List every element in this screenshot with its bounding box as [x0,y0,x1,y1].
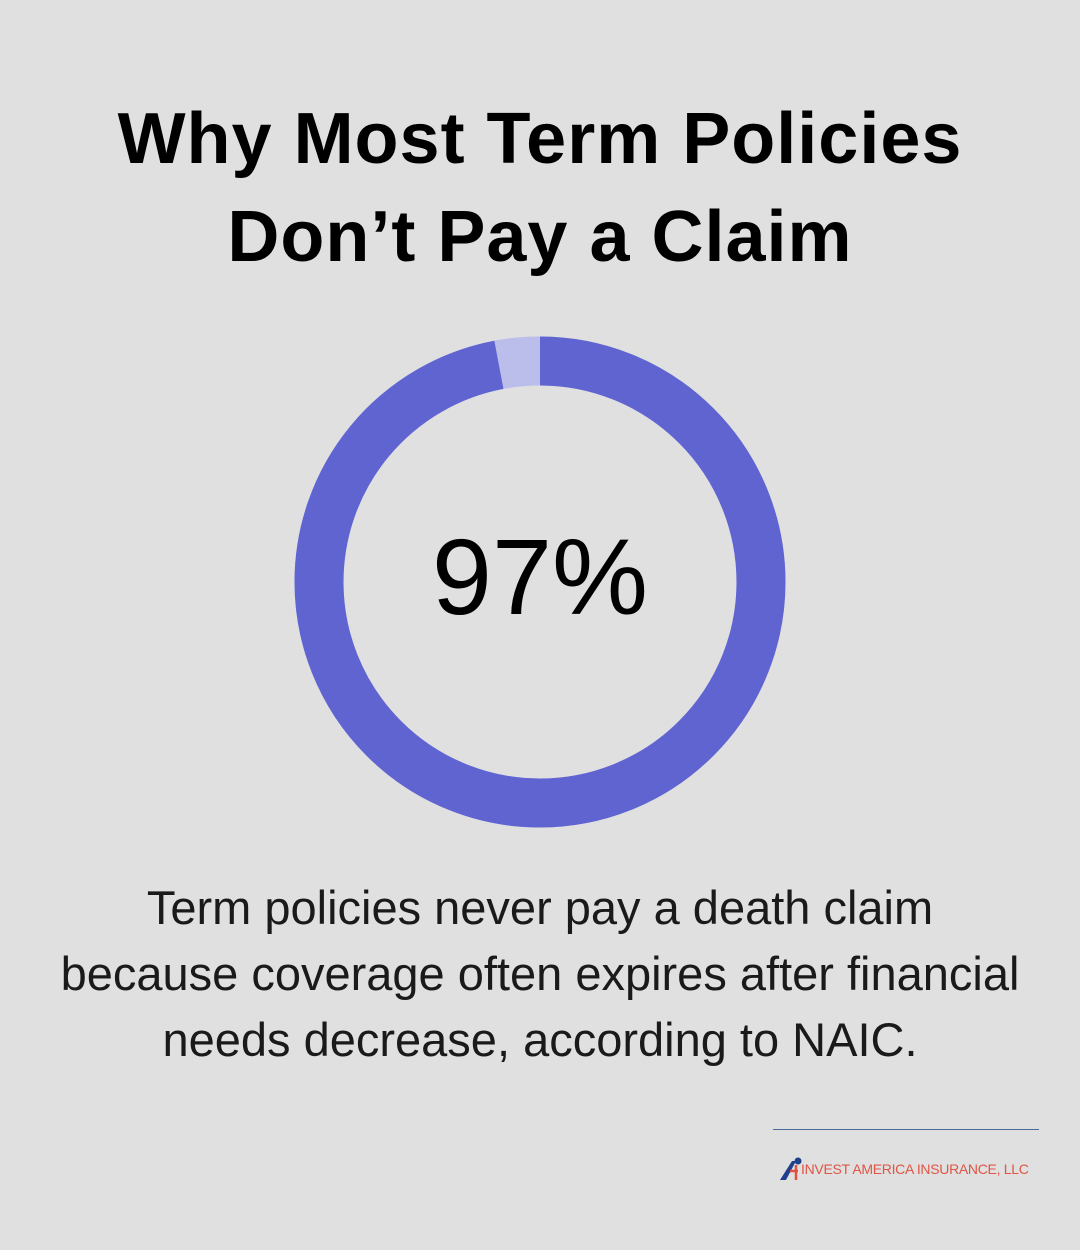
body text: Term policies never pay a death claim [147,881,933,934]
logo [773,1129,1039,1180]
donut 97% segment [319,361,761,803]
value label: 97% [432,516,648,637]
title [118,99,962,277]
donut ring background [319,361,761,803]
title: Don’t Pay a Claim [227,197,853,277]
body text [61,881,1019,1066]
body text: needs decrease, according to NAIC. [162,1013,918,1066]
title: Why Most Term Policies [118,99,962,179]
logo: INVEST AMERICA INSURANCE, LLC [801,1161,1029,1177]
body text: because coverage often expires after financial [61,947,1019,1000]
